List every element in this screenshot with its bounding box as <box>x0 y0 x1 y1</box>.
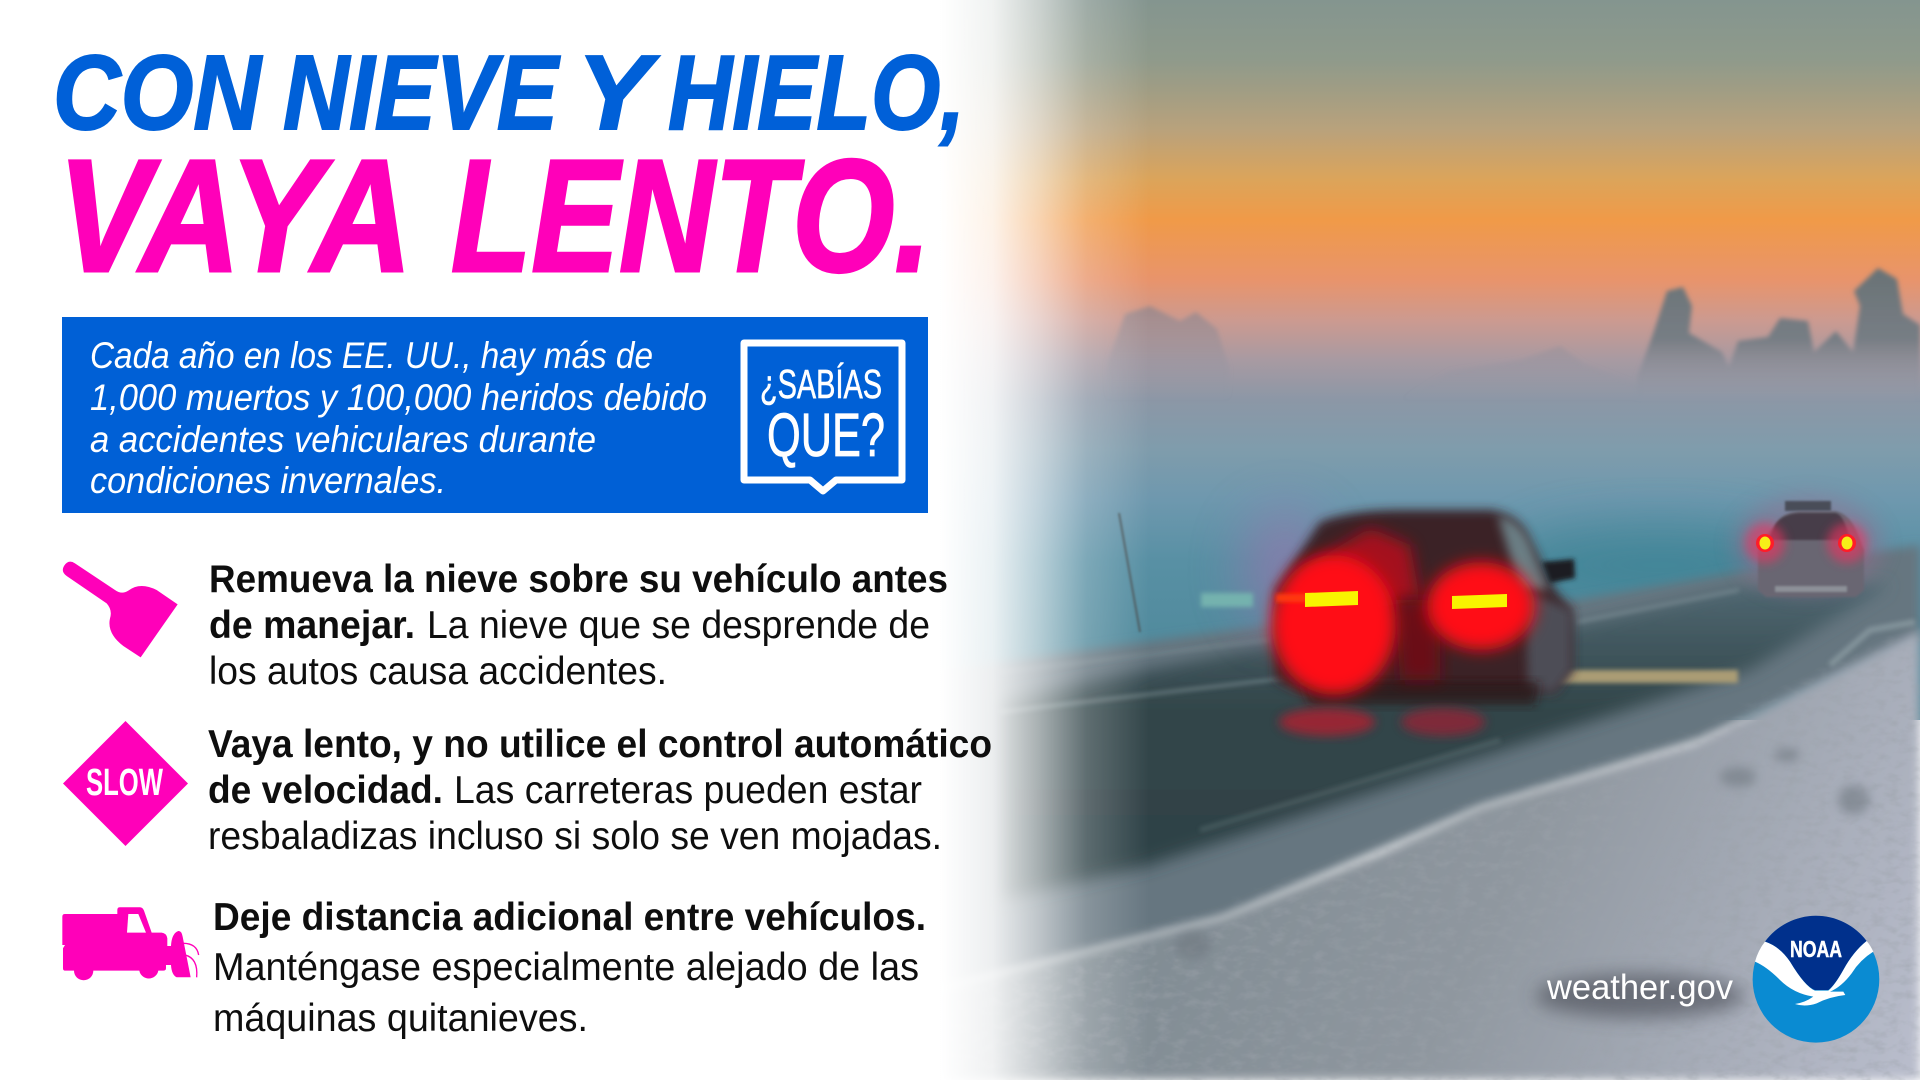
icon: NOAA logo: NOAA <box>1790 936 1842 962</box>
snow texture <box>1080 748 1920 1080</box>
icon: NOAA logo <box>1753 916 1879 1043</box>
snow lumps <box>1175 748 1870 959</box>
white fade over photo's left edge <box>940 0 1150 1080</box>
teal haze near the road <box>1534 508 1753 596</box>
speech bubble badge: QUE? <box>767 401 885 469</box>
tip text: de manejar. <box>209 604 415 647</box>
dark road surface <box>1000 585 1890 900</box>
tip text: Vaya lento, y no utilice el control automático <box>208 723 992 766</box>
tip text <box>208 723 992 858</box>
snow ground <box>940 630 1920 1080</box>
tip text <box>209 558 948 693</box>
tip text: La nieve que se desprende de <box>427 604 930 647</box>
icon: slow sign <box>63 721 188 846</box>
tip text: de velocidad. <box>208 769 443 812</box>
title line 2: VAYA <box>58 126 412 305</box>
icon: snow plow <box>62 907 199 980</box>
sky background <box>940 0 1920 720</box>
panel: did you know <box>62 317 928 513</box>
title line 1: Y <box>577 34 660 152</box>
near car <box>1201 510 1575 736</box>
tip text: Deje distancia adicional entre vehículos. <box>213 896 926 939</box>
icon: slow sign: SLOW <box>86 762 163 804</box>
tip text: máquinas quitanieves. <box>213 997 588 1040</box>
title line 2: LENTO. <box>451 126 931 305</box>
title <box>53 34 965 305</box>
speech bubble badge <box>744 343 902 491</box>
statistic text <box>90 335 707 501</box>
tip text: los autos causa accidentes. <box>209 650 667 693</box>
orange road reflection <box>1555 670 1738 683</box>
website label: weather.gov <box>1546 968 1733 1007</box>
tip 2: go slow <box>63 721 992 858</box>
tip 1: remove snow <box>63 558 948 693</box>
statistic text: a accidentes vehiculares durante <box>90 419 596 460</box>
road markings <box>1000 590 1915 830</box>
statistic text: condiciones invernales. <box>90 460 446 501</box>
title line 1: CON <box>53 34 263 152</box>
title line 1: HIELO, <box>668 34 965 152</box>
statistic text: Cada año en los EE. UU., hay más de <box>90 335 653 376</box>
tip 3: keep distance <box>62 896 926 1040</box>
speech bubble badge: ¿SABÍAS <box>760 361 882 407</box>
tip text <box>213 896 926 1040</box>
title line 1: NIEVE <box>283 34 561 152</box>
tip text: resbaladizas incluso si solo se ven mojadas. <box>208 815 942 858</box>
title line 1 <box>53 34 965 152</box>
tree line <box>1112 266 1920 378</box>
roadside bank and outer road <box>940 545 1920 988</box>
photo: car tail lights on a snowy road in fog <box>940 0 1920 1080</box>
tip text: Remueva la nieve sobre su vehículo antes <box>209 558 948 601</box>
panel background <box>62 317 928 513</box>
tip text: Las carreteras pueden estar <box>454 769 922 812</box>
far car <box>1733 495 1883 597</box>
statistic text: 1,000 muertos y 100,000 heridos debido <box>90 377 707 418</box>
roadside post <box>1119 513 1140 632</box>
tip text: Manténgase especialmente alejado de las <box>213 946 919 989</box>
icon: snow scraper <box>63 562 178 657</box>
title line 2 <box>58 126 931 305</box>
